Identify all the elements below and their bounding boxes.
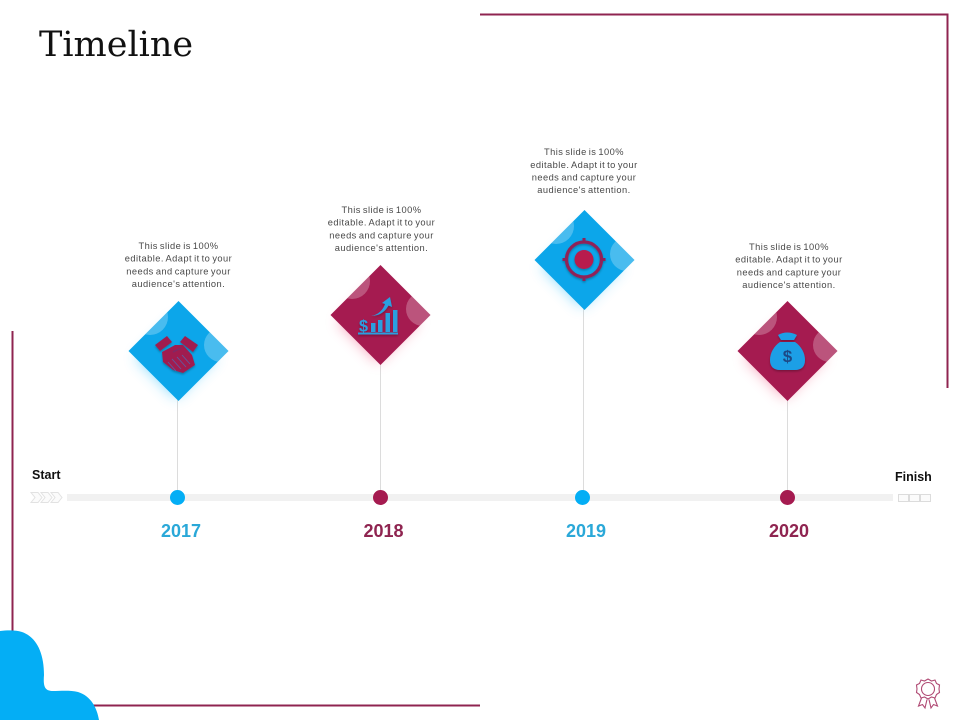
diamond 2020 [738,301,838,401]
description 2018: needs and capture your [329,230,434,240]
start label: Start [32,468,61,482]
diamond glow [338,282,418,362]
description 2020: editable. Adapt it to your [735,254,843,264]
frame: top right border [480,14,948,388]
icon: growth chart [358,297,398,336]
start chevrons [31,492,62,502]
timeline track [67,494,893,501]
year 2020: 2020 [769,521,809,541]
year 2018: 2018 [363,521,404,541]
diamond glow [745,318,825,398]
icon: award ribbon [916,679,940,708]
icon: money bag [770,332,805,370]
diamond glow [136,318,216,398]
description 2019: editable. Adapt it to your [530,160,638,170]
timeline dot 2019 [575,490,590,505]
icon: growth chart: $ [359,316,369,336]
diamond 2019 [534,210,634,310]
finish label: Finish [895,470,932,484]
timeline dot 2017 [170,490,185,505]
diamond glow [542,227,622,307]
title: Timeline [39,25,193,65]
corner blob [0,630,99,720]
milestone 2020 [736,244,842,490]
description 2017: audience's attention. [132,279,225,289]
finish squares [898,494,930,502]
description 2020: needs and capture your [737,268,841,278]
description 2020: audience's attention. [742,280,836,290]
milestone 2017 [125,242,232,490]
timeline dot 2020 [780,490,795,505]
frame: bottom left border [12,331,480,706]
icon: money bag: $ [783,347,793,366]
description 2020: This slide is 100% [749,242,829,252]
description 2018: editable. Adapt it to your [328,218,435,228]
diamond 2018 [330,265,430,365]
year 2019: 2019 [566,521,606,541]
description 2019: needs and capture your [532,172,636,182]
description 2017: editable. Adapt it to your [125,254,232,264]
timeline dot 2018 [373,490,388,505]
description 2018: audience's attention. [335,243,428,253]
description 2017: This slide is 100% [138,241,219,251]
icon: target [562,238,606,281]
description 2018: This slide is 100% [341,205,422,215]
description 2019: This slide is 100% [544,147,624,157]
year 2017: 2017 [161,521,201,541]
description 2017: needs and capture your [126,266,231,276]
milestone 2018 [328,206,435,490]
milestone 2019 [530,148,638,490]
description 2019: audience's attention. [537,185,631,195]
icon: handshake [155,336,198,373]
diamond 2017 [128,301,228,401]
